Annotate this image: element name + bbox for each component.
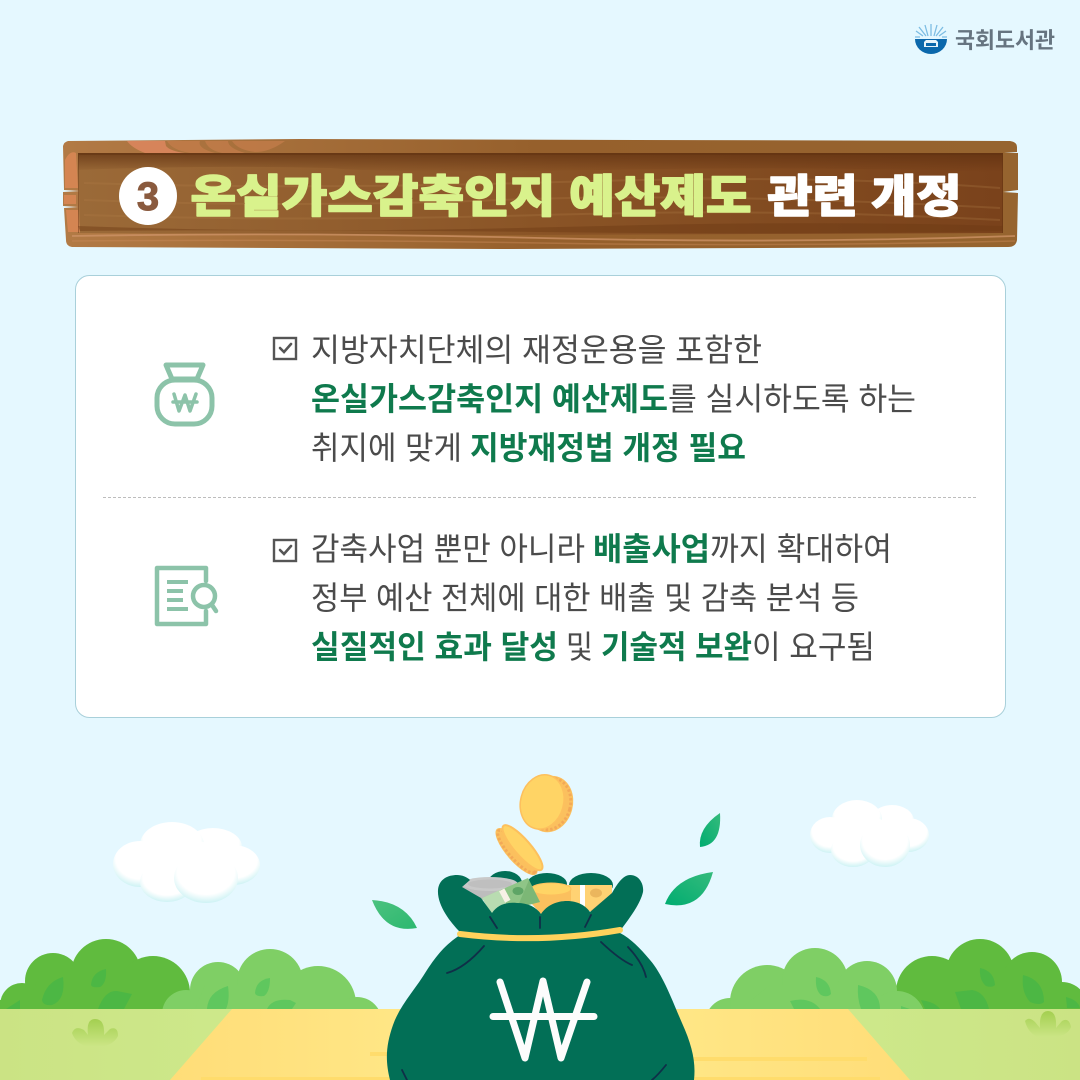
text block 2: 정부 예산 전체에 대한 배출 및 감축 분석 등 bbox=[311, 580, 859, 616]
falling coin top bbox=[514, 769, 579, 838]
bushes left bbox=[0, 939, 382, 1047]
bushes right bbox=[705, 939, 1080, 1048]
icon: document with magnifier bbox=[157, 568, 216, 624]
silver coin bbox=[462, 877, 520, 900]
text block 2: 까지 확대하여 bbox=[710, 531, 892, 567]
text block 1: 취지에 맞게 bbox=[311, 430, 462, 466]
wooden title sign bbox=[63, 139, 1018, 249]
text block 2: 기술적 보완 bbox=[601, 629, 752, 665]
text block 2: 감축사업 뿐만 아니라 bbox=[311, 531, 585, 567]
text block 1: 온실가스감축인지 예산제도 bbox=[311, 381, 668, 417]
bag body bbox=[387, 933, 694, 1080]
leaf right large bbox=[665, 872, 713, 905]
title heading: 관련 개정 bbox=[768, 171, 962, 222]
back ruffles bbox=[488, 871, 613, 897]
checkbox icon 1 bbox=[274, 338, 296, 359]
text block 2: 배출사업 bbox=[593, 531, 710, 567]
bag ruffled front bbox=[438, 875, 643, 942]
leaf right top bbox=[700, 813, 720, 847]
text block 1: 지방자치단체의 재정운용을 포함한 bbox=[311, 332, 762, 368]
step number badge bbox=[119, 167, 177, 225]
title heading bbox=[190, 171, 962, 222]
logo text: 국회도서관 bbox=[955, 28, 1055, 53]
gold coin in bag bbox=[531, 883, 571, 914]
gold note bbox=[568, 885, 612, 914]
cloud left bbox=[113, 822, 260, 903]
text block 1: 지방재정법 개정 필요 bbox=[470, 430, 746, 466]
text block 2: 실질적인 효과 달성 bbox=[311, 629, 558, 665]
logo: National Assembly Library bbox=[915, 24, 1055, 54]
ground bbox=[0, 1009, 1080, 1080]
falling coin lower bbox=[489, 819, 548, 881]
leaf left bbox=[372, 900, 417, 929]
grass tuft right bbox=[1025, 1011, 1071, 1037]
title heading: 온실가스감축인지 예산제도 bbox=[190, 171, 752, 222]
checkbox icon 2 bbox=[274, 540, 296, 561]
cloud right bbox=[810, 800, 929, 867]
rope bbox=[460, 930, 620, 938]
text block 2: 이 요구됨 bbox=[752, 629, 875, 665]
won symbol bbox=[493, 981, 594, 1058]
step number badge: 3 bbox=[137, 175, 159, 219]
text block 2: 및 bbox=[566, 629, 593, 665]
icon: logo emblem bbox=[915, 24, 947, 54]
text block 2 bbox=[311, 531, 892, 665]
panel: content card bbox=[76, 276, 1006, 718]
road bbox=[170, 1009, 910, 1080]
text block 1 bbox=[311, 332, 916, 466]
grass tuft left bbox=[72, 1019, 118, 1046]
green banknote bbox=[482, 878, 540, 914]
money bag illustration bbox=[387, 769, 694, 1080]
text block 1: 를 실시하도록 하는 bbox=[668, 381, 916, 417]
icon: money bag bbox=[157, 365, 212, 424]
bag folds bbox=[402, 915, 666, 1080]
